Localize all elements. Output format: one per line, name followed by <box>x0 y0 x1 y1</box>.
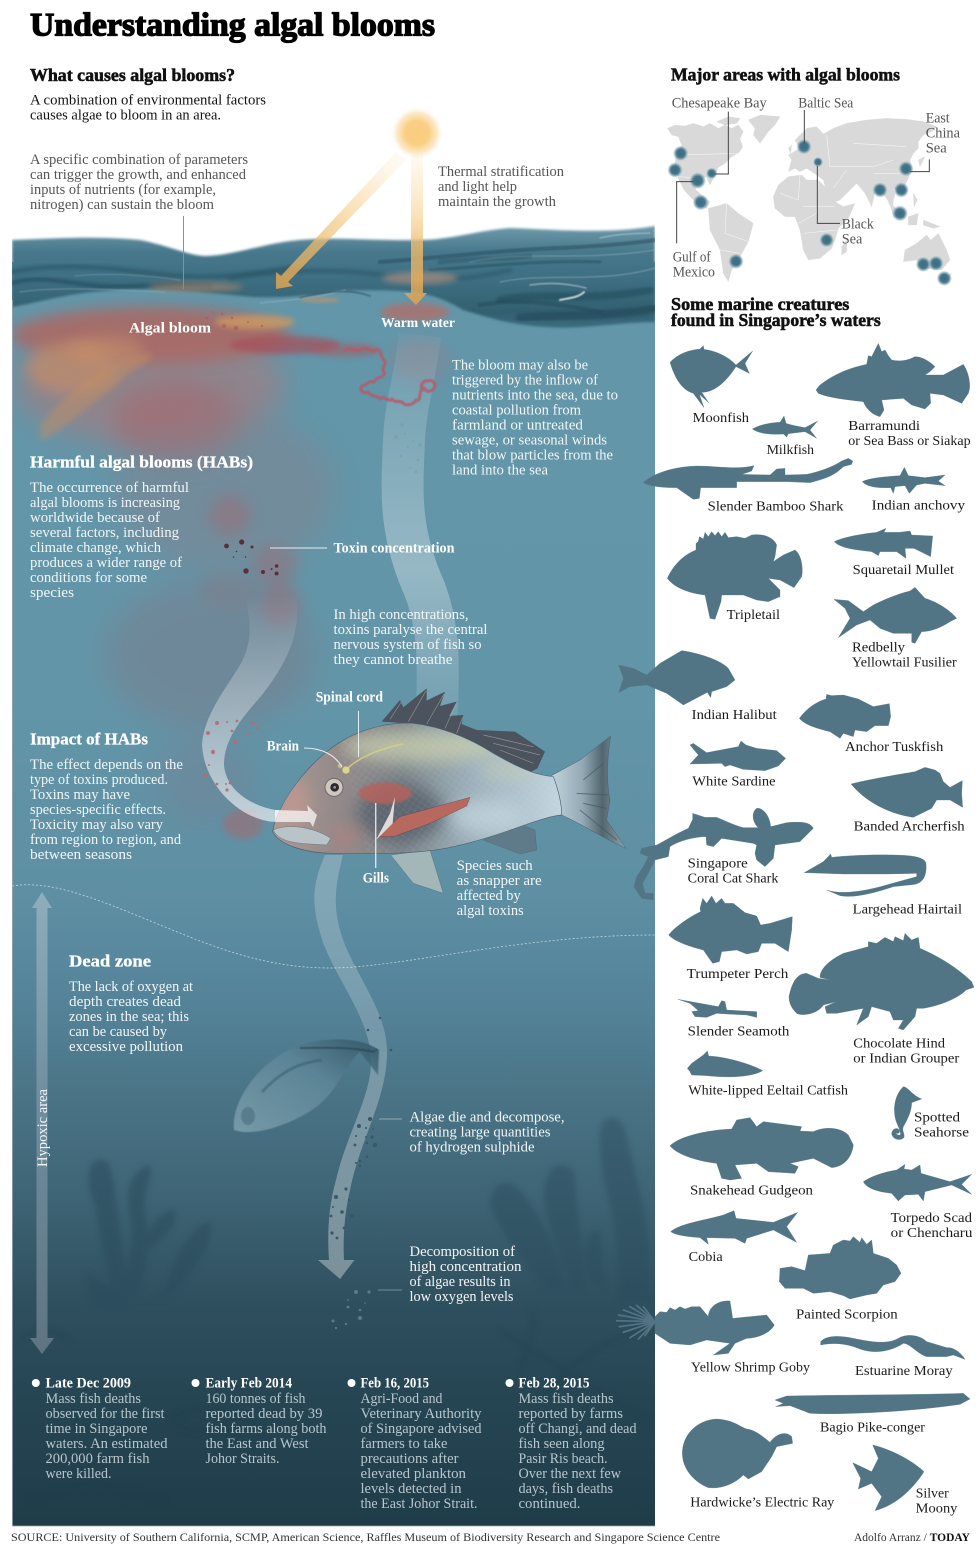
heading: major areas: Major areas with algal blooms <box>671 65 900 85</box>
moonfish <box>670 346 753 408</box>
creature labels: Squaretail Mullet <box>853 563 954 578</box>
hypoxic boundary dashed line <box>12 885 655 968</box>
timeline: feb 28 2015: Mass fish deaths <box>518 1391 614 1407</box>
hardwicke's electric ray <box>682 1419 793 1488</box>
creature labels: Silver <box>916 1487 949 1502</box>
creature labels <box>687 411 972 1517</box>
seaweed right <box>492 1118 643 1238</box>
sea surface waves <box>12 226 655 328</box>
seabed dark weeds <box>20 1310 650 1500</box>
text: high concentrations: nervous system of fish so <box>334 637 482 653</box>
hypoxic area arrow <box>30 892 54 1354</box>
text: bloom triggers: triggered by the inflow of <box>452 372 598 388</box>
text: impact of HABs: between seasons <box>30 847 132 863</box>
creatures column 1 <box>619 343 970 738</box>
creature labels: Anchor Tuskfish <box>845 740 943 755</box>
yellow shrimp goby <box>617 1301 774 1355</box>
text: impact of HABs: The effect depends on the <box>30 757 183 773</box>
heading: marine creatures: Some marine creatures <box>671 294 849 314</box>
timeline: feb 28 2015: continued. <box>518 1496 580 1512</box>
estuarine moray <box>821 1335 965 1359</box>
timeline: early feb 2014: reported dead by 39 <box>206 1406 322 1422</box>
tripletail <box>667 532 802 619</box>
text: dead zone: can be caused by <box>69 1024 168 1040</box>
creature labels: Hardwicke’s Electric Ray <box>690 1495 834 1510</box>
timeline: feb 16 2015: Feb 16, 2015 <box>360 1376 429 1392</box>
text: species affected: Species such <box>457 858 533 874</box>
indian halibut <box>619 651 735 705</box>
timeline: early feb 2014: Johor Straits. <box>206 1451 280 1467</box>
slender bamboo shark <box>643 458 853 499</box>
painted scorpion <box>779 1237 901 1299</box>
creature labels: Singapore <box>688 857 748 872</box>
map labels: Chesapeake Bay <box>672 96 767 112</box>
creature labels: or Chencharu <box>891 1226 972 1241</box>
callout: algae decompose: creating large quantities <box>410 1125 551 1141</box>
timeline: late dec 2009: 200,000 farm fish <box>46 1451 150 1467</box>
heading: dead zone: Dead zone <box>69 952 151 970</box>
creature labels: Snakehead Gudgeon <box>690 1183 813 1198</box>
callout: gills <box>363 803 389 887</box>
timeline: early feb 2014: the East and West <box>206 1436 308 1452</box>
callout: low oxygen: low oxygen levels <box>410 1289 514 1305</box>
parameters note: nitrogen) can sustain the bloom <box>30 197 215 213</box>
timeline: early feb 2014: Early Feb 2014 <box>206 1376 292 1392</box>
title: Understanding algal blooms <box>30 8 435 44</box>
callout: low oxygen: high concentration <box>410 1259 522 1275</box>
text: dead zone: excessive pollution <box>69 1039 184 1055</box>
pectoral fin <box>377 797 470 837</box>
timeline: feb 16 2015: of Singapore advised <box>360 1421 482 1437</box>
red toxin particles <box>203 720 259 792</box>
snakehead gudgeon <box>670 1118 853 1180</box>
text: high concentrations: toxins paralyse the central <box>334 622 488 638</box>
timeline: late dec 2009: waters. An estimated <box>46 1436 168 1452</box>
map labels: Sea <box>842 231 863 247</box>
callout: algae decompose: of hydrogen sulphide <box>410 1140 534 1156</box>
callout: spinal cord: Spinal cord <box>316 690 383 706</box>
text: impact of HABs: type of toxins produced. <box>30 772 168 788</box>
anchor tuskfish <box>799 694 891 738</box>
spinal cord and brain <box>346 744 403 770</box>
anal fin <box>483 824 537 854</box>
intro text: A combination of environmental factors <box>30 92 266 108</box>
callout: gills: Gills <box>363 871 389 887</box>
creature labels: Yellowtail Fusilier <box>852 656 957 671</box>
timeline: feb 28 2015: off Changi, and dead <box>518 1421 637 1437</box>
creature labels: or Sea Bass or Siakap <box>848 434 971 449</box>
sea background <box>12 262 655 1526</box>
indian anchovy <box>862 467 945 493</box>
map labels: Mexico <box>673 265 715 281</box>
creature labels: Slender Bamboo Shark <box>708 499 843 514</box>
gills <box>358 783 412 804</box>
squaretail mullet <box>834 528 933 558</box>
text: impact of HABs: species-specific effects. <box>30 802 166 818</box>
creature labels: or Indian Grouper <box>853 1052 960 1067</box>
creature labels: Torpedo Scad <box>891 1211 972 1226</box>
eye <box>325 778 343 796</box>
callout: spinal cord <box>316 690 383 757</box>
creature labels: Largehead Hairtail <box>853 902 962 917</box>
map labels: Baltic Sea <box>798 96 854 112</box>
label: warm water: Warm water <box>381 315 455 330</box>
ocean border <box>12 300 655 1526</box>
main fish: snapper <box>273 688 626 893</box>
bagio pike-conger <box>775 1393 970 1414</box>
heading: marine creatures: found in Singapore’s waters <box>671 310 881 330</box>
country borders <box>677 135 907 253</box>
timeline: feb 16 2015: levels detected in <box>360 1481 462 1497</box>
timeline: feb 16 2015: the East Johor Strait. <box>360 1496 478 1512</box>
text: bloom triggers: that blow particles from the <box>452 448 613 464</box>
trumpeter perch <box>669 896 792 963</box>
timeline: late dec 2009 <box>32 1376 168 1482</box>
timeline: feb 16 2015 <box>348 1376 482 1512</box>
callout: toxin concentration: Toxin concentration <box>334 540 454 556</box>
timeline: feb 28 2015: Pasir Ris beach. <box>518 1451 608 1467</box>
map labels <box>672 96 961 281</box>
barramundi <box>816 343 970 417</box>
creature labels: Milkfish <box>767 443 814 458</box>
timeline: late dec 2009: observed for the first <box>46 1406 164 1422</box>
goby tail fan <box>617 1305 655 1339</box>
timeline: early feb 2014: 160 tonnes of fish <box>206 1391 306 1407</box>
text: bloom triggers: The bloom may also be <box>452 358 588 374</box>
text: impact of HABs: from region to region, and <box>30 832 182 848</box>
tail fin <box>547 736 626 848</box>
callout: algae decompose: Algae die and decompose, <box>410 1110 564 1126</box>
text: dead zone: zones in the sea; this <box>69 1009 189 1025</box>
callout: low oxygen: of algae results in <box>410 1274 511 1290</box>
slender seamoth <box>678 999 757 1017</box>
callout: brain: Brain <box>267 739 299 755</box>
text: bloom triggers: nutrients into the sea, due to <box>452 388 618 404</box>
largehead hairtail <box>804 854 926 896</box>
creature labels: Barramundi <box>848 419 920 434</box>
heading: what causes algal blooms: What causes algal blooms? <box>30 65 235 85</box>
footer: credit: Adolfo Arranz / TODAY <box>854 1530 970 1544</box>
bloom specks <box>206 311 280 342</box>
dark particles along stream <box>330 1017 392 1239</box>
creature labels: Moonfish <box>693 411 749 426</box>
white stream: nutrients inflow <box>403 335 438 725</box>
creature labels: Indian anchovy <box>872 498 965 513</box>
creature labels: Cobia <box>689 1250 723 1265</box>
intro text: causes algae to bloom in an area. <box>30 108 221 124</box>
text: harmful algal blooms: worldwide because of <box>30 510 160 526</box>
torpedo scad <box>863 1164 972 1201</box>
bloom hotspots <box>667 139 952 286</box>
text: harmful algal blooms: several factors, including <box>30 525 179 541</box>
map labels: East <box>926 111 950 127</box>
map labels: Sea <box>926 141 947 157</box>
cobia <box>671 1211 798 1244</box>
timeline: feb 28 2015: reported by farms <box>518 1406 623 1422</box>
text: bloom triggers: coastal pollution from <box>452 402 582 418</box>
sun with light beams <box>276 106 444 305</box>
timeline: late dec 2009: Late Dec 2009 <box>46 1376 131 1392</box>
creature labels: Slender Seamoth <box>688 1025 789 1040</box>
thermal stratification note: Thermal stratification <box>438 164 565 180</box>
panel: ocean cross-section illustration <box>10 226 655 1526</box>
creature labels: Chocolate Hind <box>853 1037 945 1052</box>
creature labels: Yellow Shrimp Goby <box>691 1361 810 1376</box>
text: harmful algal blooms: algal blooms is increasing <box>30 495 180 511</box>
white sardine <box>690 741 786 771</box>
timeline: feb 16 2015: Agri-Food and <box>360 1391 443 1407</box>
thermal stratification note: and light help <box>438 179 517 195</box>
creatures column 3 <box>617 1118 972 1511</box>
creature labels: Estuarine Moray <box>855 1364 953 1379</box>
text: bloom triggers: land into the sea <box>452 462 549 478</box>
timeline: late dec 2009: time in Singapore <box>46 1421 148 1437</box>
hypoxic area label: Hypoxic area <box>35 1088 51 1167</box>
timeline: feb 16 2015: precautions after <box>360 1451 459 1467</box>
continents <box>667 115 952 283</box>
timeline: early feb 2014: fish farms along both <box>206 1421 327 1437</box>
stream particles: upper <box>394 423 422 473</box>
label: algal bloom: Algal bloom <box>129 320 211 336</box>
red algae squiggle <box>345 348 435 405</box>
text: harmful algal blooms: species <box>30 585 74 601</box>
callout line: parameters to bloom <box>182 216 184 289</box>
creature labels: Indian Halibut <box>692 708 777 723</box>
chocolate hind <box>789 933 974 1030</box>
singapore coral cat shark <box>634 808 813 900</box>
text: species affected: as snapper are <box>457 873 542 889</box>
creature labels: Tripletail <box>727 608 780 623</box>
creature labels: Painted Scorpion <box>796 1307 898 1322</box>
creature labels: Redbelly <box>852 641 905 656</box>
creature labels: White Sardine <box>692 774 776 789</box>
creature labels: Moony <box>916 1502 957 1517</box>
callout: low oxygen <box>378 1244 522 1305</box>
pelvic fin <box>391 850 443 893</box>
creature labels: Trumpeter Perch <box>687 967 788 982</box>
callout: low oxygen: Decomposition of <box>410 1244 515 1260</box>
lower jaw <box>273 827 331 845</box>
creatures column 2 <box>634 741 974 1140</box>
world map <box>667 110 952 286</box>
creature labels: Coral Cat Shark <box>688 872 778 887</box>
dead fish <box>234 1039 379 1132</box>
heading: harmful algal blooms: Harmful algal blooms (HABs) <box>30 452 253 472</box>
map labels: Gulf of <box>673 250 711 266</box>
fish arrow tip over mouth <box>275 805 317 827</box>
creature labels: Seahorse <box>914 1126 969 1141</box>
parameters note: can trigger the growth, and enhanced <box>30 167 247 183</box>
timeline: feb 16 2015: farmers to take <box>360 1436 448 1452</box>
toxin particles <box>224 539 279 576</box>
timeline: late dec 2009: were killed. <box>46 1466 112 1482</box>
text: high concentrations: they cannot breathe <box>334 652 452 668</box>
parameters note: A specific combination of parameters <box>30 152 248 168</box>
text: dead zone: depth creates dead <box>69 994 182 1010</box>
heading: impact of HABs: Impact of HABs <box>30 730 148 748</box>
redbelly yellowtail fusilier <box>834 587 957 643</box>
text: dead zone: The lack of oxygen at <box>69 979 193 995</box>
text: species affected: affected by <box>457 888 521 904</box>
text: harmful algal blooms: climate change, which <box>30 540 162 556</box>
silver moony <box>853 1445 924 1511</box>
parameters note: inputs of nutrients (for example, <box>30 182 216 198</box>
descending stream arrow <box>314 855 387 1279</box>
white-lipped eeltail catfish <box>687 1051 763 1077</box>
spotted seahorse <box>892 1087 922 1140</box>
creature labels: White-lipped Eeltail Catfish <box>688 1084 848 1099</box>
callout: brain <box>267 739 342 767</box>
text: impact of HABs: Toxins may have <box>30 787 130 803</box>
timeline: feb 28 2015: Over the next few <box>518 1466 622 1482</box>
map labels: Black <box>842 216 874 232</box>
text: harmful algal blooms: produces a wider range of <box>30 555 182 571</box>
timeline: feb 28 2015: fish seen along <box>518 1436 604 1452</box>
algal bloom haze <box>10 303 450 839</box>
fish body <box>273 720 563 853</box>
banded archerfish <box>851 767 963 817</box>
text: harmful algal blooms: The occurrence of harmful <box>30 480 189 496</box>
creature labels: Spotted <box>914 1111 960 1126</box>
leader lines <box>677 110 929 243</box>
text: harmful algal blooms: conditions for some <box>30 570 147 586</box>
text: bloom triggers: farmland or untreated <box>452 418 584 434</box>
creature labels: Bagio Pike-conger <box>820 1421 925 1436</box>
milkfish <box>752 416 818 438</box>
footer: source: SOURCE: University of Southern California, SCMP, American Science, Raffles Museum of Biodiversity Research and Singapore Science Centre <box>11 1530 720 1544</box>
text: impact of HABs: Toxicity may also vary <box>30 817 164 833</box>
text: bloom triggers: sewage, or seasonal winds <box>452 432 607 448</box>
callout: algae decompose <box>379 1110 564 1156</box>
timeline: feb 16 2015: elevated plankton <box>360 1466 467 1482</box>
sea floor particles <box>332 1290 371 1329</box>
timeline: late dec 2009: Mass fish deaths <box>46 1391 141 1407</box>
timeline: feb 16 2015: Veterinary Authority <box>360 1406 482 1422</box>
timeline: feb 28 2015: days, fish deaths <box>518 1481 613 1497</box>
timeline: feb 28 2015 <box>506 1376 637 1512</box>
thermal stratification note: maintain the growth <box>438 194 557 210</box>
seaweed left <box>88 1160 208 1252</box>
map labels: China <box>926 126 961 142</box>
text: high concentrations: In high concentrations, <box>334 607 468 623</box>
timeline: feb 28 2015: Feb 28, 2015 <box>518 1376 590 1392</box>
toxin stream arrow into fish mouth <box>202 614 297 822</box>
text: species affected: algal toxins <box>457 903 524 919</box>
creature labels: Banded Archerfish <box>854 820 965 835</box>
timeline: early feb 2014 <box>192 1376 327 1467</box>
dorsal fin <box>382 688 545 773</box>
